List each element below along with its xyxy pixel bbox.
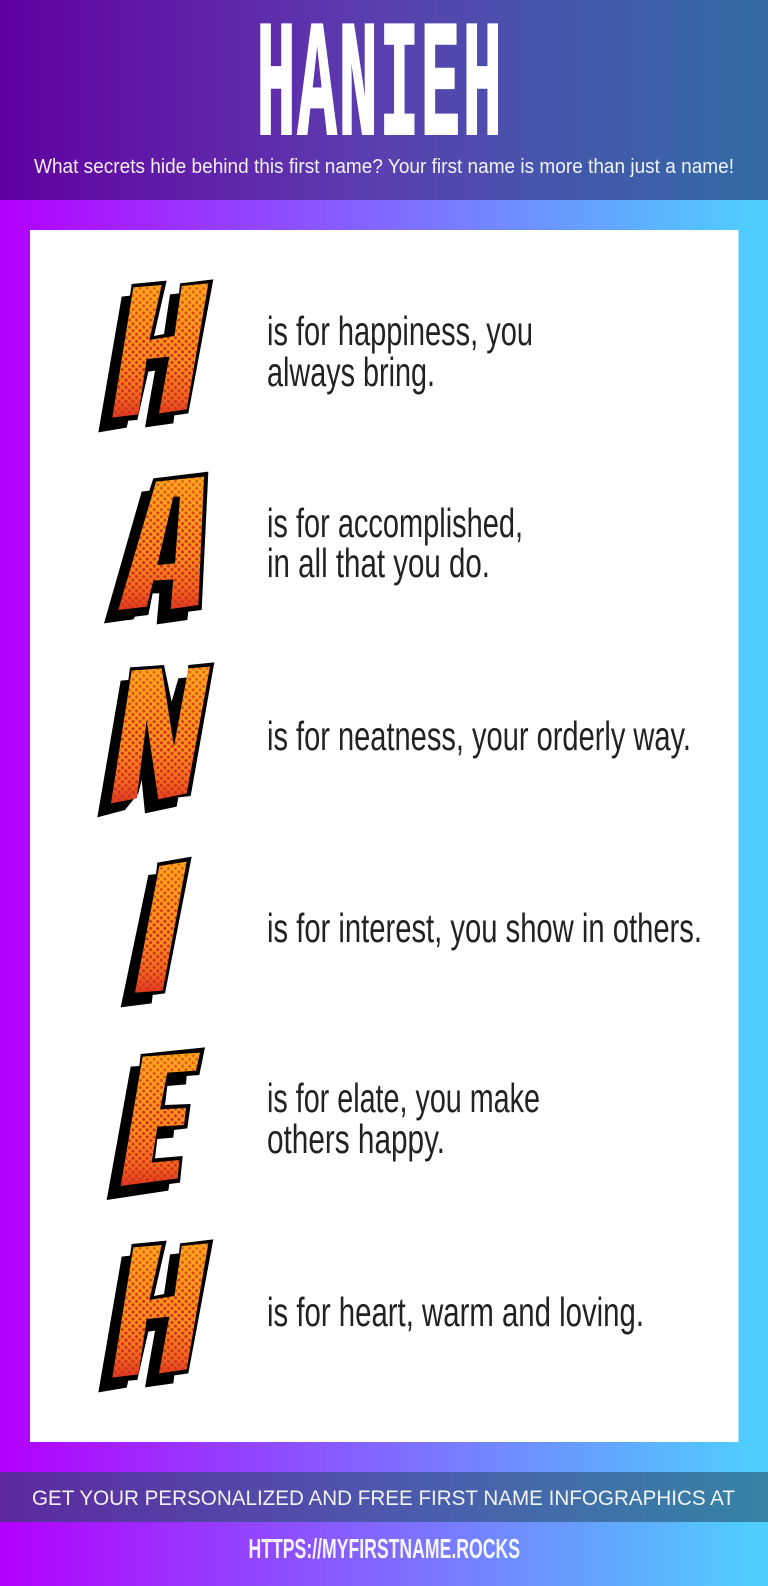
icon: comic letter H xyxy=(98,1239,213,1392)
icon: comic letter A xyxy=(104,472,208,624)
white content panel xyxy=(30,230,738,1442)
row 6: letter H xyxy=(98,1239,644,1392)
title: HANIEH xyxy=(256,0,502,183)
row 4: letter I xyxy=(121,857,702,1007)
icon: comic letter N xyxy=(97,662,214,817)
row 2: letter A xyxy=(104,472,523,624)
text: H meaning: is for happiness, you xyxy=(267,308,533,354)
text: E meaning xyxy=(267,1075,540,1162)
text: H meaning: always bring. xyxy=(267,349,435,395)
header band xyxy=(0,0,768,200)
footer call to action: GET YOUR PERSONALIZED AND FREE FIRST NAME INFOGRAPHICS AT xyxy=(32,1486,735,1510)
text: E meaning: is for elate, you make xyxy=(267,1075,540,1121)
footer url: HTTPS://MYFIRSTNAME.ROCKS xyxy=(248,1533,520,1564)
text: H meaning xyxy=(267,308,533,395)
row 3: letter N xyxy=(97,662,691,817)
icon: comic letter I xyxy=(121,857,192,1007)
text: A meaning: in all that you do. xyxy=(267,540,490,586)
row 5: letter E xyxy=(107,1047,540,1200)
text: A meaning xyxy=(267,500,523,586)
text: A meaning: is for accomplished, xyxy=(267,500,523,546)
icon: comic letter E xyxy=(107,1047,205,1200)
footer band xyxy=(0,1472,768,1522)
subtitle: What secrets hide behind this first name? Your first name is more than just a name! xyxy=(34,156,734,178)
icon: comic letter H xyxy=(98,279,213,432)
row 1: letter H xyxy=(98,279,533,432)
text: E meaning: others happy. xyxy=(267,1116,445,1162)
